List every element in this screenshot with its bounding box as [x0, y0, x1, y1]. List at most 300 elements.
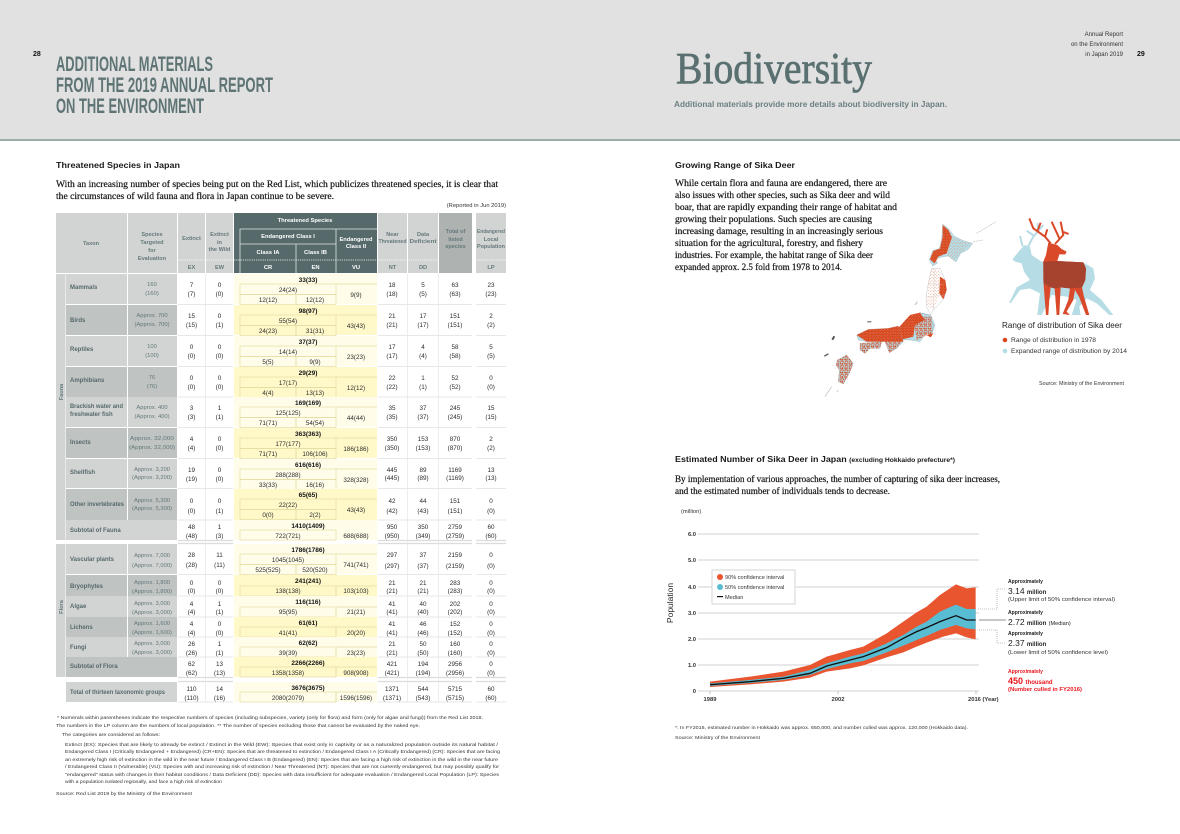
row: Other invertebrates: (151)	[448, 508, 462, 515]
row: Insects: (350)	[385, 445, 399, 452]
row: Amphibians: (22)	[386, 384, 398, 391]
row: Algae: 40	[419, 601, 427, 608]
row: Subtotal of Fauna: 688(688)	[343, 533, 369, 540]
row: Subtotal of Fauna: (349)	[416, 533, 430, 540]
row: Shellfish: 16(16)	[306, 482, 324, 489]
row: Subtotal of Fauna	[66, 520, 497, 540]
row: Vascular plants: (2159)	[446, 563, 464, 570]
row: Algae: 95(95)	[279, 609, 297, 616]
row: Other invertebrates: (43)	[417, 508, 429, 515]
row: Algae: (41)	[386, 609, 398, 616]
row: Total of thirteen taxonomic groups	[66, 682, 497, 702]
row: Subtotal of Flora: (0)	[487, 670, 495, 677]
row: Total of thirteen taxonomic groups: 14	[216, 686, 223, 693]
row: Brackish water and freshwater fish	[66, 397, 497, 428]
row: Fungi: (50)	[417, 650, 429, 657]
row: Birds: 15	[188, 313, 195, 320]
row: Brackish water and freshwater fish: 35	[388, 405, 396, 412]
paragraph: estimated number: By implementation of various approaches, the number of capturing of sika deer increases,	[675, 474, 1000, 485]
row: Brackish water and freshwater fish: (3)	[188, 414, 195, 421]
row: Lichens: Approx. 1,600	[134, 621, 170, 627]
row: Subtotal of Flora: 2956	[448, 661, 462, 668]
row: Vascular plants: (11)	[214, 562, 225, 569]
row: Brackish water and freshwater fish: 37	[419, 405, 427, 412]
running head: in Japan 2019	[1085, 52, 1124, 58]
row: Fungi: (1)	[216, 650, 223, 657]
page number 29: 29	[1137, 51, 1145, 58]
row: Lichens: (152)	[448, 630, 462, 637]
row: Bryophytes: 21	[419, 580, 427, 587]
row: Reptiles: 37(37)	[299, 339, 317, 346]
row: Subtotal of Fauna: 950	[387, 524, 398, 531]
row: Vascular plants: 741(741)	[343, 562, 369, 569]
row: Insects: 870	[450, 436, 461, 443]
axes: Population	[665, 583, 675, 623]
row: Reptiles: 5(5)	[262, 359, 274, 366]
row: Brackish water and freshwater fish: 169(169)	[295, 400, 321, 407]
axes: 2.0	[688, 637, 696, 643]
row: Lichens: 46	[419, 621, 427, 628]
row: Total of thirteen taxonomic groups: 544	[418, 686, 429, 693]
table header: Targeted	[140, 240, 164, 246]
callout: number culled: 450 thousand	[1008, 676, 1053, 686]
row: Other invertebrates: 0	[489, 498, 493, 505]
row: Insects: 106(106)	[302, 451, 328, 458]
row: Reptiles: (0)	[216, 353, 223, 360]
row: Fungi: (21)	[386, 650, 398, 657]
row: Vascular plants: 297	[387, 552, 398, 559]
row: Shellfish: (13)	[485, 475, 497, 482]
row: Subtotal of Fauna: (60)	[485, 533, 497, 540]
callout: number culled: Approximately	[1008, 669, 1043, 675]
row: Reptiles: 0	[190, 344, 194, 351]
row: Brackish water and freshwater fish: Approx. 400	[136, 405, 168, 411]
row: Insects: (2)	[487, 445, 495, 452]
row: Birds: 0	[218, 313, 222, 320]
row: Mammals	[66, 274, 497, 304]
table header: Endangered Class I	[261, 234, 315, 240]
row: Other invertebrates: Other invertebrates	[70, 502, 125, 508]
row: Amphibians: 76	[149, 375, 155, 381]
icon: sika deer silhouettes	[1009, 218, 1113, 315]
row: Subtotal of Fauna: (48)	[186, 533, 197, 540]
intro paragraph: threatened species	[56, 179, 498, 202]
row: Amphibians: 0	[218, 375, 222, 382]
table header: for	[148, 248, 157, 254]
axes	[665, 509, 999, 703]
row: Subtotal of Fauna: (950)	[385, 533, 399, 540]
row: Shellfish: (1169)	[446, 475, 464, 482]
row: Reptiles: 23(23)	[347, 354, 365, 361]
map legend: Expanded range of distribution by 2014	[1011, 349, 1128, 355]
row: Insects: Insects	[70, 440, 91, 446]
row: Algae: Algae	[70, 604, 87, 610]
row: Birds	[66, 305, 495, 336]
running head: on the Environment	[1071, 42, 1123, 48]
table footnotes: an extremely high risk of extinction in the wild in the near future / Endangered Class I B (Endangered) (EN): Species that are facing a high risk of extinction in the wild in the near future	[65, 757, 498, 763]
row: Amphibians: (0)	[487, 384, 495, 391]
map source: Source: Ministry of the Environment	[1039, 381, 1125, 387]
row: Birds: 55(54)	[279, 318, 297, 325]
row: Brackish water and freshwater fish: (1)	[216, 414, 223, 421]
row: Fungi: 62(62)	[299, 640, 317, 647]
leader lines	[978, 589, 1006, 643]
row: Amphibians: 0	[489, 375, 493, 382]
table header: Extinct	[210, 232, 229, 238]
row: Shellfish: (0)	[216, 476, 223, 483]
row: Bryophytes: (0)	[188, 588, 195, 595]
Tohoku	[926, 268, 947, 315]
row: Bryophytes: 103(103)	[343, 588, 369, 595]
row: Fungi: Approx. 3,000	[134, 641, 170, 647]
row: Vascular plants: (37)	[417, 563, 429, 570]
axes: 0	[693, 689, 696, 695]
flora side label	[56, 544, 66, 677]
table header: Threatened	[378, 239, 407, 245]
table header: EW	[215, 265, 225, 271]
row: Subtotal of Fauna: 48	[188, 524, 195, 531]
chart legend: 50% confidence interval	[725, 585, 784, 591]
table footnotes: Extinct (EX): Species that are likely to already be extinct / Extinct in the Wild (EW): Species that exist only in captivity or as a naturalized population outside its natural habitat /	[65, 742, 499, 748]
row: Birds: (Approx. 700)	[134, 322, 170, 328]
paragraph: estimated number: and the estimated number of individuals tends to decrease.	[675, 486, 890, 497]
intro paragraph: threatened species: the circumstances of wild fauna and flora in Japan continue to be severe.	[56, 191, 334, 202]
table header: Data	[417, 232, 430, 238]
axes: (million)	[681, 509, 701, 515]
page number 28: 28	[33, 51, 41, 58]
row: Birds: (151)	[448, 322, 462, 329]
heading: estimated number: Estimated Number of Sika Deer in Japan (excluding Hokkaido prefecture*)	[675, 454, 955, 464]
row: Subtotal of Flora: 194	[418, 661, 429, 668]
row: Amphibians	[66, 367, 495, 398]
map legend: Range of distribution in 1978	[1011, 338, 1097, 344]
title: Biodiversity: Biodiversity	[676, 44, 872, 93]
row: Bryophytes: (Approx. 1,800)	[132, 589, 172, 595]
row: Birds: 21	[388, 313, 396, 320]
row: Mammals: 63	[451, 282, 459, 289]
row: Birds: (17)	[417, 322, 429, 329]
row: Shellfish: 33(33)	[259, 482, 277, 489]
row: Mammals: 5	[421, 282, 425, 289]
table footnotes: / Endangered Class II (Vulnerable) (VU): Species with and increasing risk of extinction / Near Threatened (NT): Species that are not currently endangered, but may possibly qualify for	[65, 764, 499, 770]
row: Bryophytes: Bryophytes	[70, 584, 104, 590]
row: Shellfish: Approx. 3,200	[134, 467, 170, 473]
row: Insects: 350	[387, 436, 398, 443]
table footnotes: The numbers in the LP column are the numbers of local population. ** The number of species excluding those that cannot be evaluated by the naked eye.	[56, 723, 420, 729]
row: Birds: 151	[450, 313, 461, 320]
small islands	[824, 302, 917, 397]
row: Subtotal of Flora: Subtotal of Flora	[70, 664, 118, 670]
row: Subtotal of Fauna: (2759)	[446, 533, 464, 540]
callout: upper limit: (Upper limit of 50% confidence interval)	[1008, 597, 1115, 603]
callout: lower limit	[1008, 631, 1108, 656]
row: Insects: 0	[218, 436, 222, 443]
row: Algae: 116(116)	[295, 599, 321, 606]
row: Vascular plants: (Approx. 7,000)	[132, 563, 172, 569]
row: Reptiles: (4)	[419, 353, 427, 360]
row: Subtotal of Fauna: 1	[218, 524, 222, 531]
red deer 1978	[1029, 218, 1089, 315]
axes: 2002	[832, 697, 844, 703]
paragraph: estimated number	[675, 474, 1000, 497]
row: Subtotal of Flora: (194)	[416, 670, 430, 677]
row: Birds: (1)	[216, 322, 223, 329]
row: Amphibians: Amphibians	[70, 378, 105, 384]
table header: species	[445, 244, 466, 250]
table footnotes: with a population isolated regionally, and face a high risk of extinction	[65, 779, 222, 785]
row: Fungi: 0	[489, 641, 493, 648]
row: Mammals: 9(9)	[350, 292, 362, 299]
row: Reptiles	[66, 336, 495, 366]
row: Algae: (Approx. 3,000)	[132, 610, 172, 616]
callout: lower limit: (Lower limit of 50% confidence level)	[1008, 650, 1108, 656]
row: Other invertebrates: (0)	[487, 508, 495, 515]
row: Brackish water and freshwater fish: 1	[218, 405, 222, 412]
row: Mammals: Mammals	[70, 285, 98, 291]
row: Subtotal of Fauna: 1410(1409)	[291, 523, 325, 530]
row: Shellfish: 616(616)	[295, 462, 321, 469]
row: Algae: 41	[388, 601, 396, 608]
paragraph: growing range: expanded approx. 2.5 fold from 1978 to 2014.	[675, 262, 842, 273]
row: Lichens: (Approx. 1,600)	[132, 630, 172, 636]
row: Reptiles: 14(14)	[279, 349, 297, 356]
table header: the Wild	[209, 247, 231, 253]
row: Total of thirteen taxonomic groups: 1596(1596)	[340, 695, 372, 702]
row: Subtotal of Flora: 62	[188, 661, 195, 668]
row: Shellfish: 0	[218, 467, 222, 474]
row: Shellfish: (445)	[385, 475, 399, 482]
row: Amphibians: 4(4)	[262, 390, 274, 397]
row: Vascular plants: 37	[419, 552, 427, 559]
row: Brackish water and freshwater fish: 15	[487, 405, 495, 412]
row: Total of thirteen taxonomic groups: 60	[487, 686, 495, 693]
row: Subtotal of Fauna: (3)	[216, 533, 223, 540]
map: Japan sika deer distribution	[824, 222, 996, 397]
row: Other invertebrates: 0	[190, 498, 194, 505]
row: Reptiles: 17	[388, 344, 396, 351]
row: Insects: (Approx. 32,000)	[129, 445, 175, 451]
row: Insects: 2	[489, 436, 493, 443]
table footnotes	[56, 715, 500, 797]
row: Birds: 2	[489, 313, 493, 320]
western Honshu	[857, 326, 903, 353]
callout: number culled: (Number culled in FY2016)	[1008, 687, 1082, 693]
row: Birds: 98(97)	[299, 308, 317, 315]
row: Algae	[66, 596, 495, 617]
row: Vascular plants: 525(525)	[255, 567, 281, 574]
row: Amphibians: (0)	[188, 384, 195, 391]
row: Lichens: (41)	[386, 630, 398, 637]
chart legend: Median	[725, 595, 743, 601]
row: Algae: 0	[489, 601, 493, 608]
row: Other invertebrates: 151	[450, 498, 461, 505]
row: Bryophytes: (0)	[487, 588, 495, 595]
row: Total of thirteen taxonomic groups: Total of thirteen taxonomic groups	[70, 690, 166, 696]
row: Mammals: 33(33)	[299, 277, 317, 284]
row: Bryophytes: 241(241)	[295, 578, 321, 585]
row: Other invertebrates: (1)	[216, 508, 223, 515]
row: Subtotal of Flora: (13)	[214, 670, 225, 677]
row: Subtotal of Flora: (2956)	[446, 670, 464, 677]
row: Brackish water and freshwater fish: (15)	[485, 414, 497, 421]
row: Subtotal of Flora: 2266(2266)	[291, 660, 325, 667]
row: Mammals: (23)	[485, 291, 497, 298]
row: Amphibians: (76)	[147, 384, 157, 390]
row: Birds: 24(23)	[259, 328, 277, 335]
row: Shellfish: 328(328)	[343, 477, 369, 484]
paragraph: growing range	[675, 178, 897, 273]
row: Fungi: (26)	[186, 650, 197, 657]
row: Fungi: 50	[419, 641, 427, 648]
row: Algae: 4	[190, 601, 194, 608]
row: Lichens: (0)	[216, 630, 223, 637]
row: Vascular plants: (28)	[186, 562, 197, 569]
row: Birds: 17	[419, 313, 427, 320]
row: Insects: 71(71)	[259, 451, 277, 458]
callout: upper limit: Approximately	[1008, 579, 1043, 585]
row: Bryophytes: 138(138)	[275, 588, 301, 595]
row: Amphibians: 13(13)	[306, 390, 324, 397]
report date: (Reported in Jun 2019)	[447, 203, 506, 209]
row: Shellfish: (89)	[417, 475, 429, 482]
table header: Endangered	[340, 237, 373, 243]
row: Other invertebrates: 65(65)	[299, 492, 317, 499]
row: Fungi: 1	[218, 641, 222, 648]
row: Algae: (4)	[188, 609, 195, 616]
row: Subtotal of Flora	[66, 657, 495, 677]
row: Insects: 4	[190, 436, 194, 443]
row: Insects: (870)	[448, 445, 462, 452]
row: Other invertebrates	[66, 489, 495, 520]
row: Lichens: 41(41)	[279, 630, 297, 637]
row: Reptiles: (100)	[145, 353, 159, 359]
table header: Endangered	[477, 229, 506, 235]
table footnotes: Endangered Class I (Critically Endangered + Endangered) (CR+EN): Species that are threatened to extinction / Endangered Class I A (Critically Endangered) (CR): Species that are facing	[65, 749, 500, 755]
row: Shellfish: 288(288)	[275, 472, 301, 479]
row: Bryophytes: (21)	[417, 588, 429, 595]
row: Other invertebrates: 0	[218, 498, 222, 505]
row: Bryophytes: 0	[218, 580, 222, 587]
row: Lichens: 20(20)	[347, 630, 365, 637]
row: Vascular plants: 1786(1786)	[291, 547, 325, 554]
table header: Evaluation	[138, 256, 167, 262]
row: Brackish water and freshwater fish: 125(125)	[275, 410, 301, 417]
row: Reptiles: (5)	[487, 353, 495, 360]
row: Bryophytes	[66, 575, 495, 596]
axes: 6.0	[688, 532, 696, 538]
row: Brackish water and freshwater fish: 54(54)	[306, 420, 324, 427]
row: Shellfish: 13	[487, 467, 495, 474]
row: Amphibians: (0)	[216, 384, 223, 391]
row: Other invertebrates: Approx. 5,300	[134, 498, 170, 504]
row: Subtotal of Flora: (62)	[186, 670, 197, 677]
axes: 5.0	[688, 558, 696, 564]
title: additional materials: ADDITIONAL MATERIALS	[56, 53, 213, 76]
row: Insects: Approx. 32,000	[130, 436, 174, 442]
row: Brackish water and freshwater fish: (245)	[448, 414, 462, 421]
row: Bryophytes: (283)	[448, 588, 462, 595]
row: Birds: Birds	[70, 318, 86, 324]
row: Fungi: (160)	[448, 650, 462, 657]
row: Algae: (40)	[417, 609, 429, 616]
median line	[710, 616, 976, 685]
row: Algae: (202)	[448, 609, 462, 616]
row: Algae: Approx. 3,000	[134, 601, 170, 607]
row: Mammals: (0)	[216, 291, 223, 298]
row: Subtotal of Flora: 421	[387, 661, 398, 668]
heading: growing range: Growing Range of Sika Deer	[675, 160, 796, 170]
row: Other invertebrates: 22(22)	[279, 502, 297, 509]
row: Other invertebrates: 0(0)	[262, 512, 274, 519]
heading: threatened species: Threatened Species in Japan	[56, 160, 180, 170]
row: Other invertebrates: 44	[419, 498, 427, 505]
flora side label: Flora	[59, 599, 65, 614]
table header: Taxon	[83, 241, 100, 247]
table footnotes: The categories are considered as follows:	[62, 732, 160, 738]
map legend: Range of distribution of Sika deer	[1002, 321, 1122, 330]
row: Mammals: (63)	[449, 291, 461, 298]
row: Mammals: (18)	[386, 291, 398, 298]
row: Insects: (0)	[216, 445, 223, 452]
table footnotes: * Numerals within parentheses indicate the respective numbers of species (including subspecies, variety (only for flora) and form (only for algae and fungi)) from the Red List 2018.	[57, 715, 483, 721]
row: Subtotal of Fauna: 350	[418, 524, 429, 531]
row: Lichens: 4	[190, 621, 194, 628]
row: Birds: Approx. 700	[136, 313, 168, 319]
row: Vascular plants: (0)	[487, 563, 495, 570]
table header: in	[217, 240, 223, 246]
row: Shellfish: (Approx. 3,200)	[132, 475, 172, 481]
row: Algae: (0)	[487, 609, 495, 616]
row: Brackish water and freshwater fish: (37)	[417, 414, 429, 421]
row: Bryophytes: 21	[388, 580, 396, 587]
row: Amphibians: 17(17)	[279, 380, 297, 387]
row: Fungi: 23(23)	[347, 650, 365, 657]
row: Shellfish: 1169	[448, 467, 462, 474]
row: Brackish water and freshwater fish: (Approx. 400)	[134, 414, 170, 420]
row: Fungi: 21	[388, 641, 396, 648]
row: Insects: 153	[418, 436, 429, 443]
table header: Near	[386, 232, 400, 238]
row: Total of thirteen taxonomic groups: 110	[186, 686, 197, 693]
row: Other invertebrates: (0)	[188, 508, 195, 515]
row: Insects: 186(186)	[343, 446, 369, 453]
paragraph: growing range: industries. For example, the habitat range of Sika deer	[675, 250, 874, 261]
row: Insects: (153)	[416, 445, 430, 452]
row: Mammals: 18	[388, 282, 396, 289]
row: Subtotal of Fauna: Subtotal of Fauna	[70, 528, 121, 534]
row: Mammals: 12(12)	[259, 297, 277, 304]
Shikoku	[860, 342, 882, 353]
row: Amphibians: 1	[421, 375, 425, 382]
line chart: sika deer population	[665, 509, 1115, 703]
table header: Total of	[446, 229, 466, 235]
row: Subtotal of Flora: 13	[216, 661, 223, 668]
row: Vascular plants: 0	[489, 552, 493, 559]
table header: Threatened Species	[278, 218, 332, 224]
table header: Local	[484, 237, 499, 243]
subtitle: Additional materials provide more details about biodiversity in Japan.	[674, 99, 947, 109]
row: Amphibians: 52	[451, 375, 459, 382]
row: Other invertebrates: 42	[388, 498, 396, 505]
callout: number culled	[1008, 669, 1082, 693]
chart footnotes	[675, 725, 968, 741]
row: Subtotal of Fauna: 60	[487, 524, 495, 531]
table header: Population	[477, 244, 506, 250]
row: Subtotal of Flora: 908(908)	[343, 670, 369, 677]
intro paragraph: threatened species: With an increasing number of species being put on the Red List, which publicizes threatened species, it is clear that	[56, 179, 498, 190]
row: Subtotal of Flora: 0	[489, 661, 493, 668]
table header: LP	[487, 265, 495, 271]
